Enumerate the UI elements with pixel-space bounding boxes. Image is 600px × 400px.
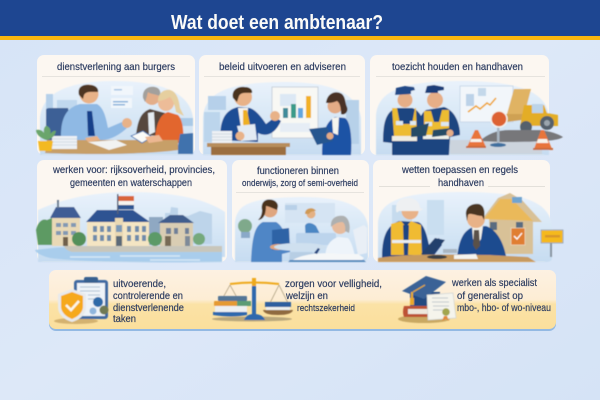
item: uitvoerende taken bbox=[54, 277, 184, 325]
text: controlerende en bbox=[113, 290, 183, 302]
panel: beleid uitvoeren en adviseren bbox=[199, 55, 365, 155]
text: uitvoerende, bbox=[113, 278, 166, 290]
illustration: government buildings and flag bbox=[35, 192, 225, 262]
item: veiligheid en welzijn bbox=[212, 278, 382, 322]
illustration: inspector and official bbox=[378, 192, 563, 262]
panel: dienstverlening aan burgers bbox=[36, 55, 195, 155]
heading: dienstverlening aan burgers bbox=[57, 61, 175, 73]
text: mbo-, hbo- of wo-niveau bbox=[457, 302, 551, 314]
text bbox=[113, 278, 184, 325]
heading: wetten toepassen en regels bbox=[401, 164, 518, 176]
panel: functioneren binnen onderwijs en zorg bbox=[232, 160, 369, 262]
heading: functioneren binnen bbox=[257, 165, 339, 177]
icon: scales and books bbox=[212, 278, 293, 322]
text: taken bbox=[113, 313, 136, 325]
text: rechtszekerheid bbox=[297, 303, 355, 314]
item: specialist of generalist bbox=[398, 276, 551, 323]
illustration: inspectors on site bbox=[376, 81, 563, 155]
text: dienstverlenende bbox=[113, 302, 184, 314]
text: welzijn en bbox=[285, 290, 328, 302]
heading line 2: gemeenten en waterschappen bbox=[70, 177, 192, 189]
heading line 2: handhaven bbox=[438, 177, 484, 189]
header banner bbox=[0, 0, 600, 40]
heading: toezicht houden en handhaven bbox=[392, 61, 523, 73]
text: zorgen voor velligheid, bbox=[285, 278, 382, 290]
panel: werken voor overheden bbox=[35, 160, 227, 262]
heading: werken voor: rijksoverheid, provincies, bbox=[52, 164, 215, 176]
text bbox=[285, 278, 382, 314]
illustration: teacher and care bbox=[235, 197, 368, 262]
icon: graduation cap and diploma bbox=[398, 276, 456, 323]
text bbox=[451, 277, 551, 314]
illustration: office conversation bbox=[36, 81, 193, 155]
title: Wat doet een ambtenaar? bbox=[171, 12, 383, 34]
text: of generalist op bbox=[457, 290, 523, 302]
text: werken als specialist bbox=[451, 277, 537, 289]
heading: beleid uitvoeren en adviseren bbox=[219, 61, 346, 73]
bottom summary band bbox=[49, 270, 556, 331]
heading line 2: onderwijs, zorg of semi-overheid bbox=[242, 178, 358, 189]
icon: clipboard and shield bbox=[54, 277, 108, 324]
panel: wetten toepassen en regels handhaven bbox=[373, 160, 563, 262]
illustration: policy presentation bbox=[203, 82, 361, 155]
panel: toezicht houden en handhaven bbox=[370, 55, 563, 155]
